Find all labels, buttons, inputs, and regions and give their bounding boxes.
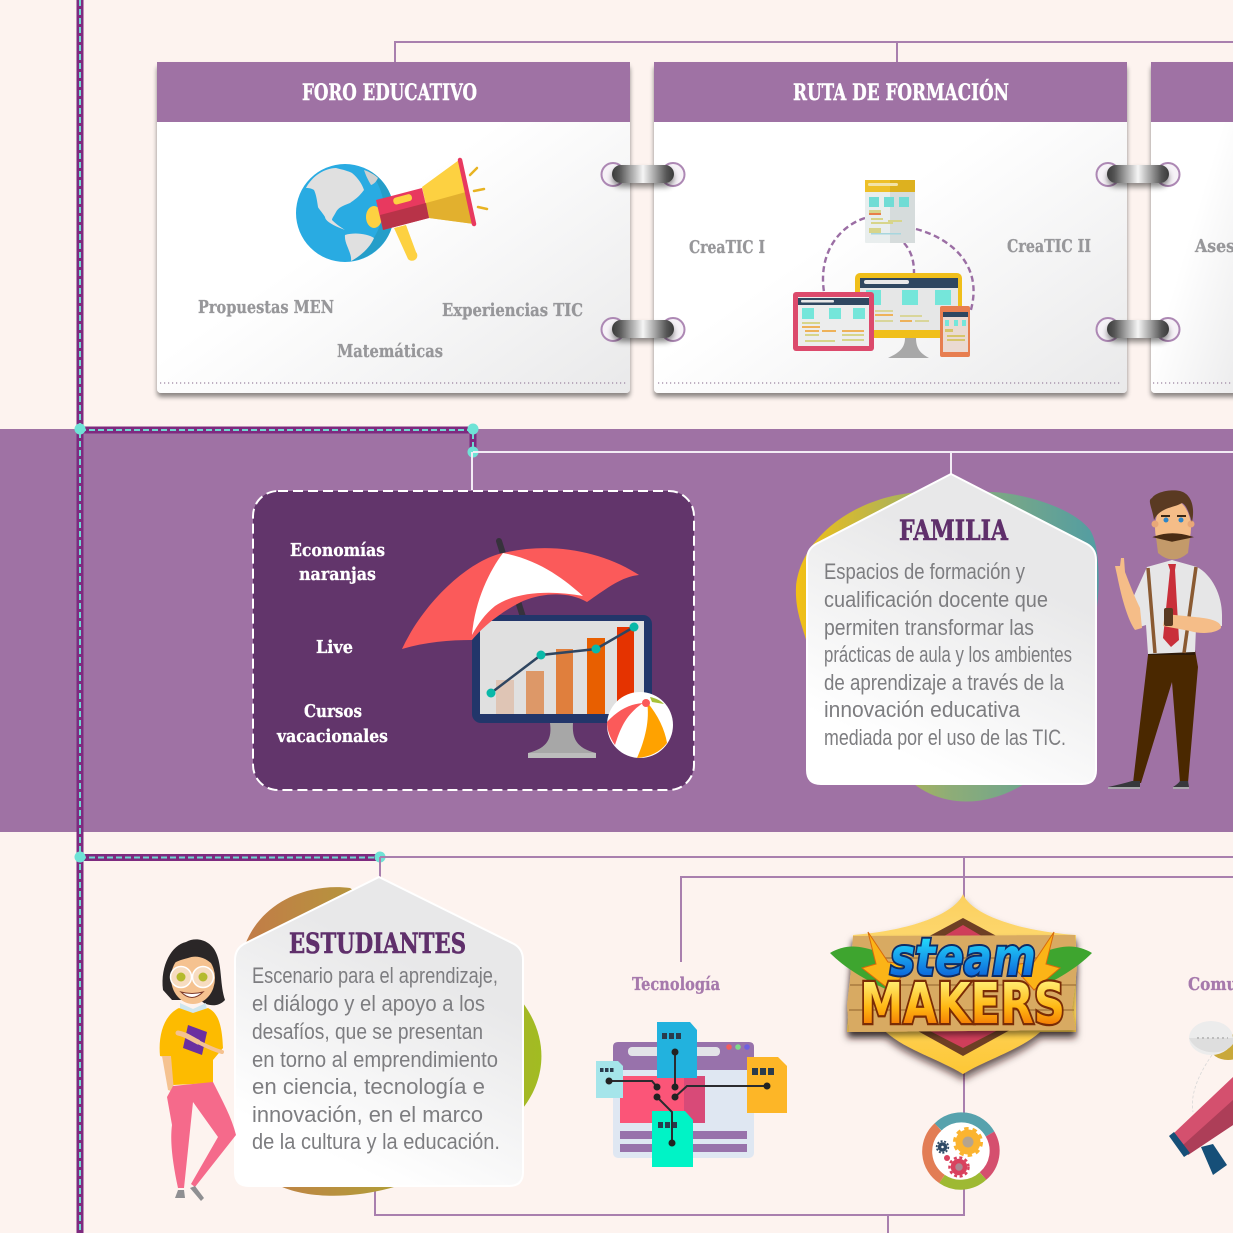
connector: white lines in band bbox=[472, 452, 1233, 490]
label: Tecnología: Tecnología bbox=[632, 974, 720, 995]
label: Live: Live bbox=[316, 637, 353, 658]
text: Familia description: prácticas de aula y los ambientes bbox=[824, 642, 1072, 667]
text: Familia description: de aprendizaje a través de la bbox=[824, 670, 1065, 695]
icon: megaphone with balloon (cropped) bbox=[1169, 1021, 1233, 1175]
wordmark: MAKERS: MAKERS bbox=[860, 972, 1065, 1037]
label: Experiencias TIC: Experiencias TIC bbox=[442, 300, 583, 321]
connector: lower row bbox=[375, 857, 1233, 1233]
card: Ruta de Formación bbox=[654, 62, 1127, 393]
icon: globe and megaphone bbox=[296, 160, 487, 262]
spine: dashed vertical and branches bbox=[74, 0, 478, 1233]
binder rings between cards bbox=[602, 163, 1180, 341]
panel: Estudiantes bbox=[235, 877, 541, 1196]
blob: brown to green backdrop bbox=[245, 887, 541, 1196]
panel: cultural offer dashed box bbox=[253, 491, 694, 790]
label: Cursos vacacionales: vacacionales bbox=[276, 726, 388, 747]
text: Familia description: cualificación docente que bbox=[824, 587, 1048, 612]
heading: Ruta de Formación: RUTA DE FORMACIÓN bbox=[793, 79, 1009, 106]
label: Cursos vacacionales: Cursos bbox=[304, 701, 362, 722]
text: Familia description: innovación educativa bbox=[824, 697, 1021, 722]
label: Matemáticas: Matemáticas bbox=[337, 341, 443, 362]
house-shaped card bbox=[235, 877, 523, 1186]
label: CreaTIC I: CreaTIC I bbox=[689, 237, 765, 258]
icon: umbrella, chart monitor and beach ball bbox=[402, 541, 673, 758]
text: Familia description: Espacios de formación y bbox=[824, 559, 1025, 584]
house-shaped card bbox=[807, 474, 1096, 784]
heading: Foro Educativo: FORO EDUCATIVO bbox=[302, 80, 477, 106]
blob: yellow to teal backdrop bbox=[796, 492, 1099, 802]
label: Propuestas MEN: Propuestas MEN bbox=[198, 297, 334, 318]
wordmark: steam: steam bbox=[890, 928, 1036, 988]
text: Estudiantes description: el diálogo y el apoyo a los bbox=[252, 991, 485, 1016]
label: Economías naranjas bbox=[290, 540, 385, 585]
label: Economías naranjas: Economías bbox=[290, 540, 385, 561]
text: Estudiantes description bbox=[252, 963, 500, 1154]
character: woman with glasses and book bbox=[160, 939, 236, 1201]
text: Estudiantes description: innovación, en el marco bbox=[252, 1102, 483, 1127]
heading: Familia: FAMILIA bbox=[899, 514, 1009, 547]
logo: Steam Makers badge bbox=[830, 894, 1092, 1074]
text: Familia description bbox=[824, 559, 1072, 750]
text: Estudiantes description: de la cultura y la educación. bbox=[252, 1129, 500, 1154]
card: Asesorías (cropped) bbox=[1151, 62, 1233, 393]
text: Familia description: mediada por el uso de las TIC. bbox=[824, 725, 1066, 750]
purple band bbox=[0, 429, 1233, 832]
text: Estudiantes description: en torno al emprendimiento bbox=[252, 1047, 498, 1072]
icon: responsive devices bbox=[793, 180, 974, 358]
text: Familia description: permiten transformar las bbox=[824, 615, 1034, 640]
panel: Familia bbox=[796, 474, 1099, 802]
label: CreaTIC II: CreaTIC II bbox=[1007, 236, 1091, 257]
text: Estudiantes description: en ciencia, tecnología e bbox=[252, 1074, 485, 1099]
icon: web flow diagram bbox=[596, 1022, 787, 1167]
text: Estudiantes description: Escenario para el aprendizaje, bbox=[252, 963, 498, 988]
connector: top row bbox=[395, 42, 1233, 62]
card: Foro Educativo bbox=[157, 62, 630, 393]
label: Cursos vacacionales bbox=[276, 701, 388, 747]
heading: Estudiantes: ESTUDIANTES bbox=[289, 927, 466, 960]
character: man with suspenders bbox=[1108, 490, 1222, 789]
label: Economías naranjas: naranjas bbox=[299, 564, 376, 585]
icon: gears ring bbox=[927, 1117, 995, 1185]
text: Estudiantes description: desafíos, que se presentan bbox=[252, 1019, 483, 1044]
